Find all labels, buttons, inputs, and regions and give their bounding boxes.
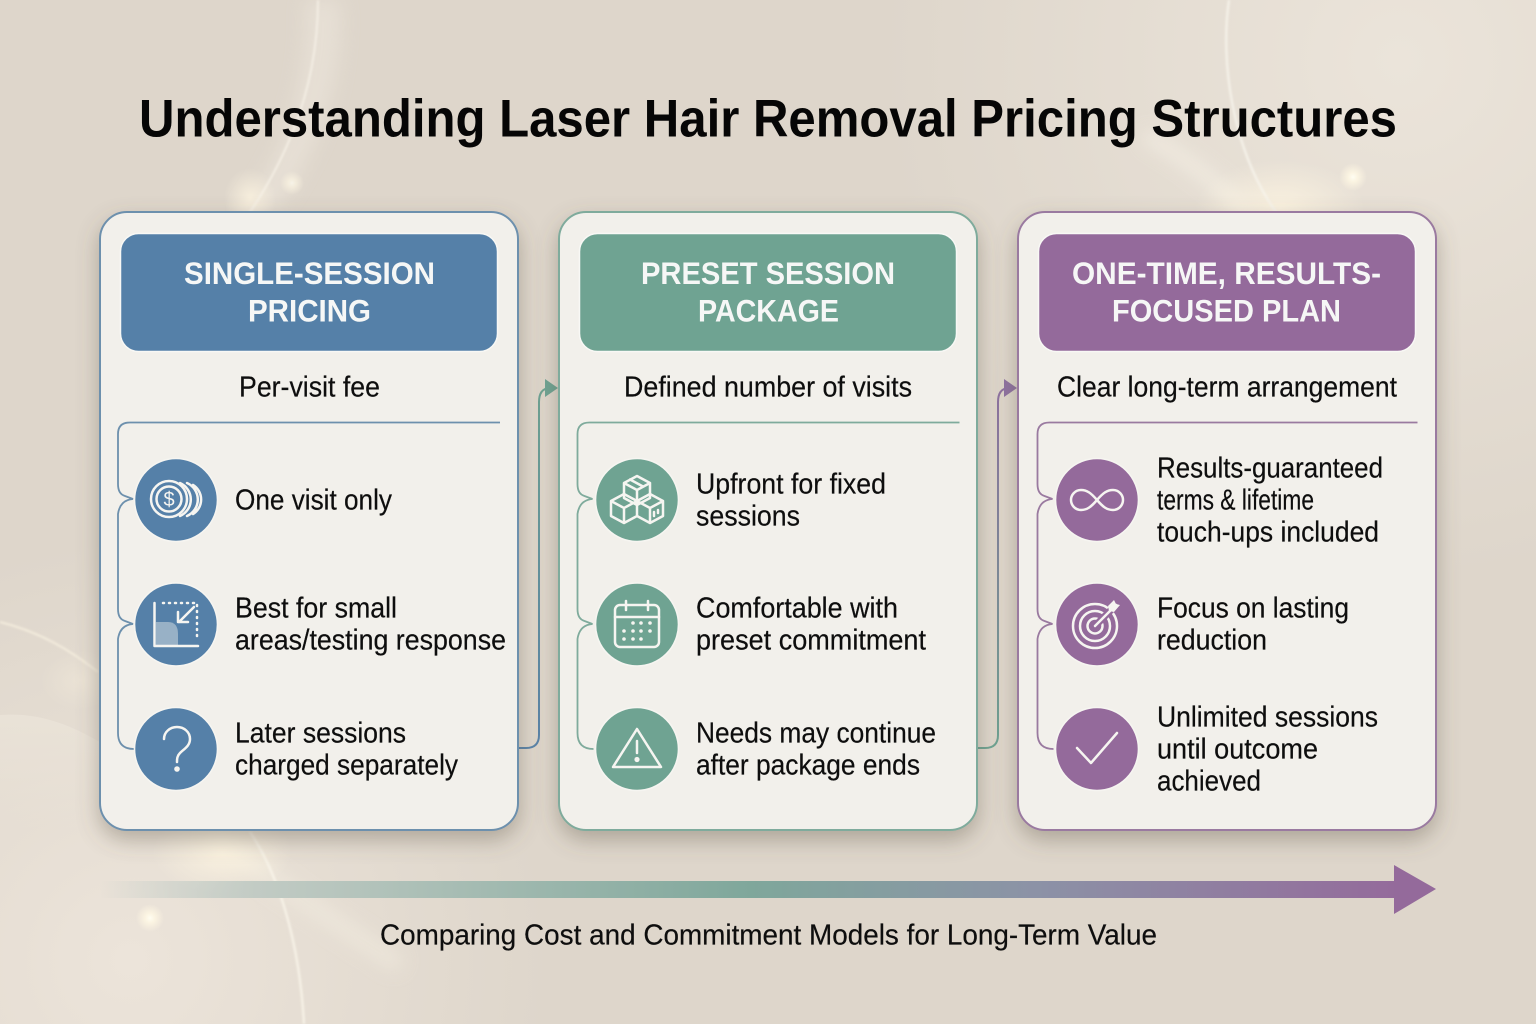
text: results-guaranteed terms: terms & lifetime	[1157, 484, 1314, 516]
bracket connector	[118, 422, 500, 749]
text: needs may continue	[696, 718, 936, 782]
icon: calendar	[596, 583, 678, 666]
text: comfortable with preset commitment: preset commitment	[696, 624, 926, 656]
icon: question mark	[134, 708, 218, 790]
header: single-session pricing: SINGLE-SESSION	[184, 255, 435, 291]
icon: small area	[134, 583, 218, 666]
text: results-guaranteed terms	[1157, 452, 1383, 548]
text: comfortable with preset commitment	[696, 592, 926, 656]
icon: coins: $	[163, 489, 175, 511]
icon: check mark	[1056, 708, 1138, 790]
icon: target	[1056, 583, 1138, 666]
title: Understanding Laser Hair Removal Pricing Structures	[139, 90, 1397, 148]
header: one-time results-focused plan	[1038, 234, 1416, 352]
header: single-session pricing: PRICING	[248, 292, 371, 328]
header: single-session pricing	[120, 234, 498, 352]
text: needs may continue: Needs may continue	[696, 718, 936, 750]
header: one-time results-focused plan: ONE-TIME, RESULTS-	[1072, 255, 1381, 291]
header: preset session package	[580, 234, 956, 352]
subtitle: per-visit fee: Per-visit fee	[239, 372, 380, 404]
text: upfront for fixed sessions: Upfront for fixed	[696, 468, 886, 500]
text: later sessions: charged separately	[235, 750, 459, 782]
text: focus on lasting reduction	[1157, 592, 1349, 656]
subtitle: defined number of visits: Defined number of visits	[624, 372, 912, 404]
text: best for small areas: areas/testing response	[235, 624, 506, 656]
text: needs may continue: after package ends	[696, 750, 920, 782]
text: unlimited sessions: achieved	[1157, 766, 1261, 798]
text: unlimited sessions: Unlimited sessions	[1157, 702, 1378, 734]
text: upfront for fixed sessions: sessions	[696, 500, 800, 532]
text: results-guaranteed terms: Results-guaranteed	[1157, 452, 1383, 484]
text: one visit only: One visit only	[235, 484, 393, 516]
header: preset session package: PRESET SESSION	[641, 255, 895, 291]
icon: coins	[134, 458, 218, 542]
text: later sessions: Later sessions	[235, 718, 406, 750]
subtitle: clear long-term arrangement: Clear long-term arrangement	[1057, 372, 1397, 404]
connector arrow: single session to package	[519, 379, 558, 748]
text: later sessions	[235, 718, 459, 782]
connector arrow: package to results plan	[978, 379, 1017, 748]
text: focus on lasting reduction: Focus on lasting	[1157, 592, 1349, 624]
icon: boxes	[596, 458, 678, 542]
panel: single-session pricing	[100, 212, 518, 830]
progress arrow	[100, 865, 1436, 914]
text: comfortable with preset commitment: Comfortable with	[696, 592, 898, 624]
icon: warning	[596, 708, 678, 790]
text: focus on lasting reduction: reduction	[1157, 624, 1267, 656]
bracket connector	[1038, 422, 1418, 749]
panel: one-time results-focused plan	[1018, 212, 1436, 830]
panel: preset session package	[559, 212, 977, 830]
header: one-time results-focused plan: FOCUSED PLAN	[1112, 292, 1341, 328]
text: results-guaranteed terms: touch-ups included	[1157, 516, 1379, 548]
text: unlimited sessions: until outcome	[1157, 734, 1318, 766]
header: preset session package: PACKAGE	[698, 292, 839, 328]
text: upfront for fixed sessions	[696, 468, 886, 532]
text: unlimited sessions	[1157, 702, 1378, 798]
text: best for small areas: Best for small	[235, 592, 397, 624]
caption: Comparing Cost and Commitment Models for Long-Term Value	[380, 920, 1157, 952]
text: best for small areas	[235, 592, 506, 656]
icon: infinity	[1056, 458, 1138, 542]
bracket connector	[578, 422, 960, 749]
